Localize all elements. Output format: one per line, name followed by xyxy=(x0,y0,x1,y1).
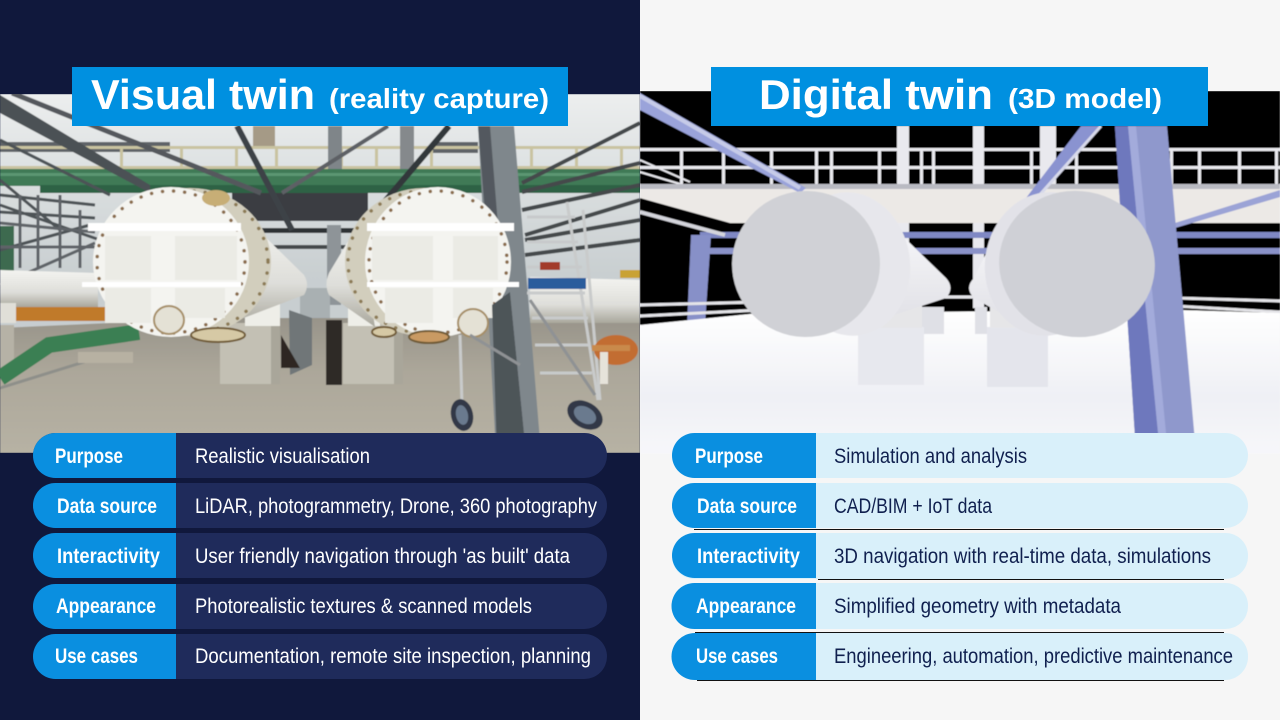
row: interactivity xyxy=(33,533,607,578)
panel: digital twin background xyxy=(640,0,1280,720)
blue steel column xyxy=(1115,126,1196,453)
row: purpose: Purpose xyxy=(55,445,123,468)
title: visual twin: (reality capture) xyxy=(329,83,549,114)
row: data source xyxy=(33,483,607,528)
row: appearance xyxy=(33,584,607,629)
row: use cases: Documentation, remote site inspection, planning xyxy=(195,645,591,668)
row: use cases: Use cases xyxy=(55,645,138,668)
title: digital twin xyxy=(711,67,1208,126)
row: appearance: Appearance xyxy=(696,595,796,618)
render: 3D model of heat exchangers xyxy=(640,91,1280,454)
row: use cases xyxy=(33,634,607,679)
row: purpose: Simulation and analysis xyxy=(834,445,1027,468)
table: digital twin attributes xyxy=(671,433,1248,680)
row: purpose: Realistic visualisation xyxy=(195,445,370,468)
title: digital twin: (3D model) xyxy=(1008,83,1162,114)
row: use cases xyxy=(671,633,1248,680)
row: data source: Data source xyxy=(697,495,797,518)
row: use cases: Use cases xyxy=(696,645,778,668)
row: use cases: Engineering, automation, predictive maintenance xyxy=(834,645,1233,668)
photo: reality capture of heat exchangers xyxy=(0,93,640,453)
row: appearance: Appearance xyxy=(56,595,156,618)
row: interactivity: User friendly navigation through 'as built' data xyxy=(195,545,570,568)
row: data source: CAD/BIM + IoT data xyxy=(834,495,992,518)
title: visual twin: Visual twin xyxy=(91,71,315,118)
title: visual twin xyxy=(72,67,568,126)
row: interactivity: Interactivity xyxy=(57,545,160,568)
row: data source: Data source xyxy=(57,495,157,518)
table: visual twin attributes xyxy=(33,433,607,679)
steel column lower section xyxy=(492,292,524,433)
row: appearance xyxy=(672,583,1248,632)
row: data source xyxy=(672,483,1248,530)
panel: visual twin background xyxy=(0,0,640,720)
row: data source: LiDAR, photogrammetry, Drone, 360 photography xyxy=(195,495,597,518)
row: interactivity: 3D navigation with real-time data, simulations xyxy=(834,545,1211,568)
pedestals xyxy=(220,323,403,384)
title: digital twin: Digital twin xyxy=(759,71,993,118)
row: interactivity: Interactivity xyxy=(697,545,800,568)
row: interactivity xyxy=(672,533,1248,580)
row: purpose xyxy=(33,433,607,478)
row: purpose xyxy=(672,433,1248,478)
row: purpose: Purpose xyxy=(695,445,763,468)
row: appearance: Photorealistic textures & scanned models xyxy=(195,595,532,618)
row: appearance: Simplified geometry with metadata xyxy=(834,595,1121,618)
